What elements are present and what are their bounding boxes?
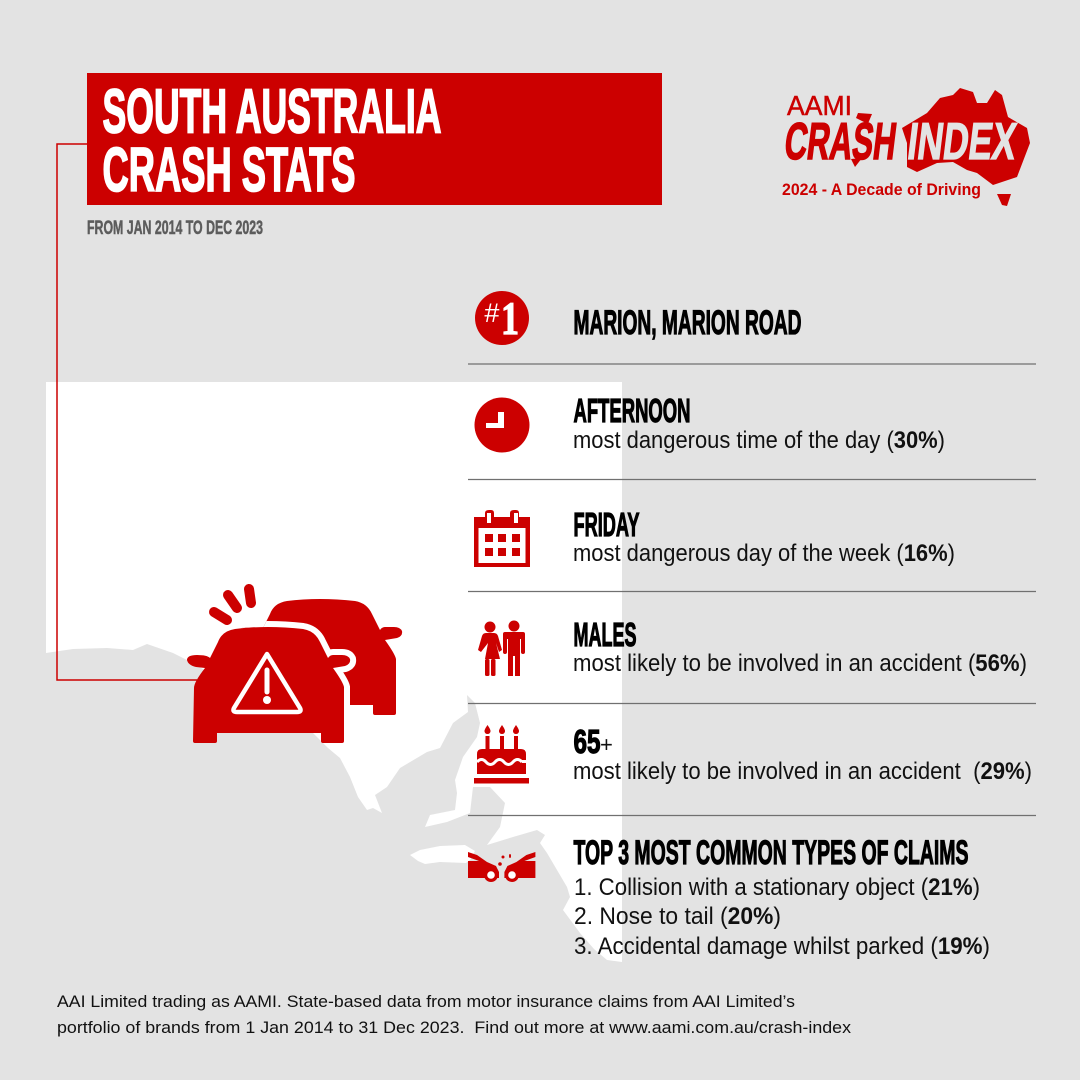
date range subtitle: FROM JAN 2014 TO DEC 2023 (87, 217, 263, 239)
logo: Australia map (902, 88, 1030, 185)
icon: calendar (474, 510, 530, 567)
row dividers (468, 364, 1036, 816)
footer note (57, 993, 852, 1037)
row: afternoon: most dangerous time of the day (30%) (573, 427, 945, 454)
row: males (573, 616, 1027, 677)
map: Kangaroo Island (410, 845, 475, 864)
icon: number one: # (484, 298, 500, 328)
row: top three claim types: 3. Accidental damage whilst parked (19%) (574, 933, 990, 960)
row: age group: most likely to be involved in an accident (29%) (573, 758, 1032, 785)
icon: birthday cake (474, 725, 529, 784)
logo: AAMI Crash Index: INDEX (905, 113, 1020, 171)
title text line one: SOUTH AUSTRALIA (102, 78, 442, 146)
logo: AAMI Crash Index: CRASH (782, 113, 900, 171)
connector line (57, 144, 197, 680)
row: top three claim types: 2. Nose to tail (20%) (574, 903, 781, 930)
row: age group: + (600, 732, 613, 757)
icon: clock (474, 398, 530, 452)
logo: AAMI Crash Index: 2024 - A Decade of Driving (782, 181, 981, 199)
footer note: AAI Limited trading as AAMI. State-based data from motor insurance claims from AAI Limited’s (57, 993, 795, 1011)
icon: number one (475, 291, 529, 345)
row: top three claim types: 1. Collision with a stationary object (21%) (574, 874, 980, 901)
icon: male and female figures (478, 620, 525, 676)
row: location: MARION, MARION ROAD (574, 304, 802, 342)
icon: number one: 1 (501, 293, 519, 345)
row: afternoon: AFTERNOON (574, 392, 690, 429)
logo: AAMI Crash Index (782, 88, 1030, 206)
footer note: portfolio of brands from 1 Jan 2014 to 31 Dec 2023. Find out more at www.aami.com.au/crash-index (57, 1019, 852, 1037)
logo: AAMI Crash Index: AAMI (787, 90, 852, 121)
map: South Australia land (46, 382, 622, 962)
row: age group (573, 723, 1032, 785)
row: friday: most dangerous day of the week (16%) (573, 540, 955, 567)
title banner (87, 73, 662, 205)
row: males: most likely to be involved in an accident (56%) (573, 650, 1027, 677)
row: friday (573, 506, 955, 567)
row: top three claim types (574, 834, 990, 960)
icon: two cars colliding (468, 852, 535, 882)
row: age group: 65 (574, 723, 600, 760)
row: afternoon (573, 392, 945, 454)
icon: crashed cars with warning (187, 589, 402, 743)
row: friday: FRIDAY (574, 506, 640, 543)
title text line two: CRASH STATS (102, 136, 356, 205)
row: males: MALES (574, 616, 636, 653)
